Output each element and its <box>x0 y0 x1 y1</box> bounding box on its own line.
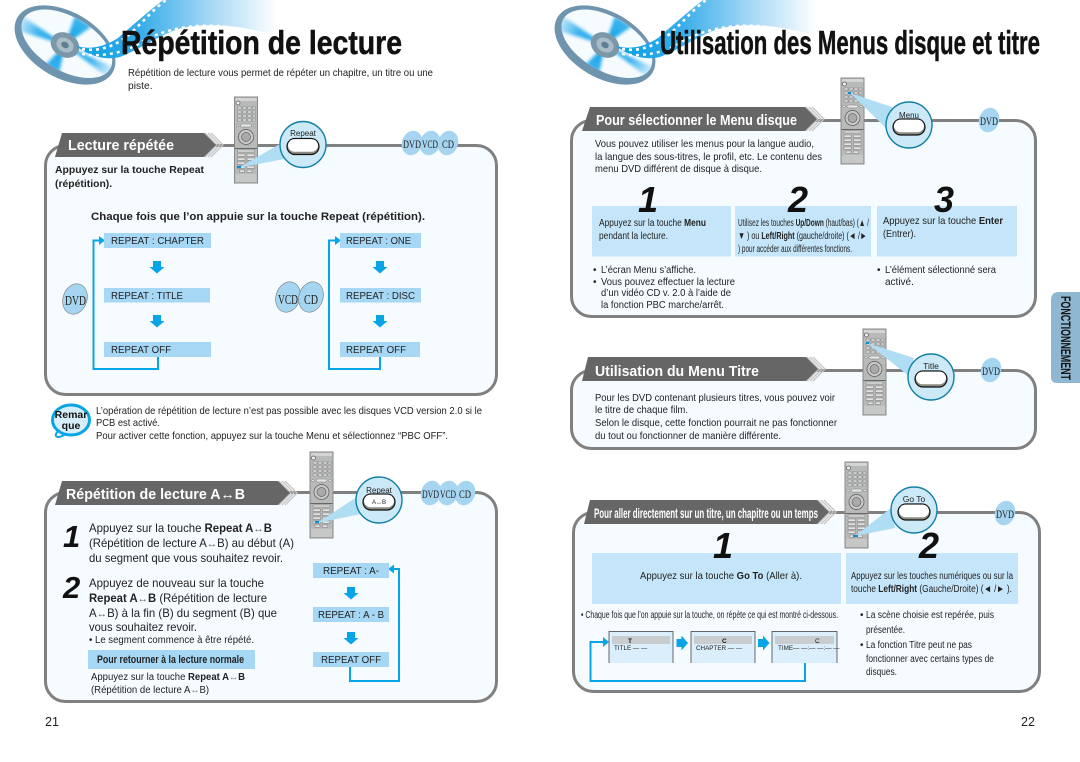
flow: A-B repeat modes: REPEAT OFF <box>321 655 381 666</box>
notes right: La fonction Titre peut ne pas <box>866 640 972 651</box>
screen: CHAPTER <box>691 632 755 663</box>
screen: TITLE <box>609 632 673 663</box>
instruction: (répétition). <box>55 179 112 190</box>
step 3 box: Appuyez sur la touche Enter <box>883 216 1003 227</box>
arrow <box>676 636 688 650</box>
flow: DVD repeat modes <box>94 233 211 369</box>
section tab <box>55 133 223 157</box>
panel: Répétition de lecture A-B <box>46 452 496 702</box>
callout box: return to normal play <box>88 650 255 669</box>
section tab: Lecture répétée <box>68 137 174 154</box>
disc badges DVD VCD CD: DVD <box>403 137 421 151</box>
section tab: Utilisation du Menu Titre <box>595 363 759 380</box>
intro text: la langue des sous-titres, le profil, etc. Le contenu des <box>595 152 822 163</box>
body text: Pour les DVD contenant plusieurs titres, vous pouvez voir <box>595 393 836 404</box>
flow: VCD / CD repeat modes: REPEAT : ONE <box>346 236 411 247</box>
page header graphic: left disc and film strip <box>1 0 277 101</box>
disc badges DVD VCD CD <box>399 128 461 158</box>
screen: CHAPTER: CHAPTER — — <box>696 645 743 652</box>
step 2 box: ▼ ) ou Left/Right (gauche/droite) (◄ /► <box>738 231 867 242</box>
step 1: du segment que vous souhaitez revoir. <box>89 551 283 565</box>
notes right: fonctionner avec certains types de <box>866 654 994 665</box>
step 3 box: (Entrer). <box>883 229 916 240</box>
flow: A-B repeat modes: REPEAT : A - B <box>318 610 384 621</box>
badges: VCD CD: CD <box>304 293 318 308</box>
flow: A-B repeat modes: REPEAT : A- <box>323 566 379 577</box>
side tab: FONCTIONNEMENT <box>1051 292 1080 383</box>
screen: TITLE: TITLE — — <box>614 645 648 652</box>
page number 22: 22 <box>1021 715 1035 729</box>
flow: DVD repeat modes: REPEAT OFF <box>111 345 171 356</box>
step 2 box: ) pour accéder aux différentes fonctions. <box>738 244 852 255</box>
step 1: Appuyez sur la touche Repeat A↔B <box>89 521 272 535</box>
badge: DVD: DVD <box>996 507 1014 521</box>
intro text <box>128 68 433 92</box>
page header graphic: right disc and film strip <box>541 0 817 101</box>
remote with Menu button callout: Menu <box>899 111 919 120</box>
remote with Title button callout <box>863 329 954 415</box>
remote with Go To button callout <box>845 462 937 548</box>
callout: Remarque: Remar <box>55 409 87 421</box>
intro text: Répétition de lecture vous permet de répéter un chapitre, un titre ou une <box>128 68 433 79</box>
panel: Utilisation du Menu Titre <box>572 329 1036 448</box>
badge: DVD <box>976 105 1002 135</box>
notes right: disques. <box>866 667 897 678</box>
remote with Repeat A-B button callout: A↔B <box>372 500 386 506</box>
return instructions: (Répétition de lecture A↔B) <box>91 685 209 696</box>
flow: VCD / CD repeat modes: REPEAT : DISC <box>346 291 415 302</box>
step 1 <box>63 519 294 565</box>
badge: DVD: DVD <box>980 114 998 128</box>
section tab <box>582 357 825 381</box>
flow: A-B repeat modes <box>313 563 399 681</box>
section tab <box>55 481 297 505</box>
notes left: Vous pouvez effectuer la lecture <box>601 277 735 288</box>
instruction: Appuyez sur la touche Repeat <box>55 165 205 176</box>
badges: VCD CD: VCD <box>278 293 298 308</box>
step 1: 1 <box>63 519 80 554</box>
body text: le titre de chaque film. <box>595 405 688 416</box>
panel: Pour sélectionner le Menu disque <box>572 78 1036 316</box>
screen: TIME: TIME— —:— —:— — <box>778 645 840 652</box>
remote with Repeat A-B button callout <box>310 452 402 538</box>
notes left: • <box>593 265 597 276</box>
step 2 box: touche Left/Right (Gauche/Droite) (◄ /► ). <box>851 584 1012 595</box>
screen: TITLE: T <box>628 638 632 645</box>
step 2 box: 2 <box>787 179 808 220</box>
note text: L’opération de répétition de lecture n’est pas possible avec les disques VCD version 2.0 si le <box>96 406 482 417</box>
arrow <box>758 636 770 650</box>
remote with Title button callout: Title <box>923 361 939 371</box>
flow: DVD repeat modes: REPEAT : TITLE <box>111 291 183 302</box>
step 2: vous souhaitez revoir. <box>89 620 197 634</box>
flow: VCD / CD repeat modes <box>329 233 421 369</box>
body text <box>595 393 838 442</box>
panel: Pour aller directement <box>574 462 1040 692</box>
notes left: L’écran Menu s’affiche. <box>601 265 696 276</box>
step 2: A↔B) à la fin (B) du segment (B) que <box>89 606 277 620</box>
instruction <box>55 165 205 190</box>
remote with Go To button callout: Go To <box>903 494 926 504</box>
step 1 box: pendant la lecture. <box>599 231 668 242</box>
intro text: Vous pouvez utiliser les menus pour la langue audio, <box>595 139 814 150</box>
note text <box>96 406 482 442</box>
step 2: Appuyez de nouveau sur la touche <box>89 576 264 590</box>
note text: Pour activer cette fonction, appuyez sur la touche Menu et sélectionnez “PBC OFF”. <box>96 431 448 442</box>
section tab <box>582 107 824 131</box>
side tab: FONCTIONNEMENT: FONCTIONNEMENT <box>1058 296 1073 380</box>
step 1 box <box>592 179 731 256</box>
intro text: menu DVD différent de disque à disque. <box>595 164 762 175</box>
badge: DVD <box>978 355 1004 385</box>
return instructions: Appuyez sur la touche Repeat A↔B <box>91 672 245 683</box>
flow: VCD / CD repeat modes: REPEAT OFF <box>346 345 406 356</box>
section tab <box>584 500 836 524</box>
step 2 box <box>846 525 1018 604</box>
intro text <box>595 139 822 175</box>
step 1 box: 1 <box>638 179 658 220</box>
section tab: Pour aller directement sur un titre, un chapitre ou un temps <box>594 505 818 521</box>
callout box: return to normal play: Pour retourner à la lecture normale <box>97 654 244 666</box>
note text: PCB est activé. <box>96 418 160 429</box>
notes right: activé. <box>885 277 914 288</box>
remote with Repeat A-B button callout: Repeat <box>366 486 393 495</box>
notes right: L’élément sélectionné sera <box>885 265 996 276</box>
return instructions <box>91 672 245 696</box>
notes left: • <box>593 277 597 288</box>
badge: DVD: DVD <box>65 294 86 309</box>
page number 21: 21 <box>45 715 59 729</box>
notes right <box>860 610 994 678</box>
badge: DVD <box>59 281 91 317</box>
subheading: Chaque fois que l’on appuie sur la touche Repeat (répétition). <box>91 211 425 223</box>
step 3 box: 3 <box>934 179 954 220</box>
screen: CHAPTER: C <box>722 638 727 645</box>
section tab: Pour sélectionner le Menu disque <box>596 113 797 129</box>
step 2 <box>62 570 277 646</box>
badge: DVD: DVD <box>982 364 1000 378</box>
intro text: piste. <box>128 81 153 92</box>
step 2: 2 <box>62 570 80 605</box>
screen sequence with loop <box>590 632 840 681</box>
step 1 box: Appuyez sur la touche Go To (Aller à). <box>640 571 802 582</box>
screen: TIME <box>772 632 840 663</box>
step 1 box: 1 <box>713 525 733 566</box>
notes left <box>593 265 735 311</box>
step 2 box: Utilisez les touches Up/Down (haut/bas) (▲ / <box>738 218 869 229</box>
flow: DVD repeat modes: REPEAT : CHAPTER <box>111 236 204 247</box>
step 2: Repeat A↔B (Répétition de lecture <box>89 591 267 605</box>
notes right: • <box>860 640 864 651</box>
section tab: Répétition de lecture A↔B <box>66 486 245 503</box>
bullet note: • Chaque fois que l’on appuie sur la touche, on répète ce qui est montré ci-dessous. <box>581 610 838 621</box>
step 2: • Le segment commence à être répété. <box>89 635 254 646</box>
callout: Remarque: que <box>62 420 80 432</box>
panel: Lecture répétée <box>46 97 496 394</box>
notes right: • <box>860 610 864 621</box>
step 1 box <box>592 525 841 604</box>
badge: DVD <box>992 498 1018 528</box>
body text: du tout ou fonctionner de manière différente. <box>595 431 781 442</box>
badges: VCD CD <box>272 279 327 315</box>
notes right: présentée. <box>866 625 905 636</box>
step 1: (Répétition de lecture A↔B) au début (A) <box>89 536 294 550</box>
notes right: • <box>877 265 881 276</box>
remote with Menu button callout <box>841 78 932 164</box>
disc badges DVD VCD CD: CD <box>459 487 471 501</box>
disc badges DVD VCD CD <box>418 478 478 508</box>
title: Répétition de lecture: Répétition de lecture <box>121 24 402 61</box>
disc badges DVD VCD CD: CD <box>442 137 454 151</box>
disc badges DVD VCD CD: VCD <box>422 137 438 151</box>
disc badges DVD VCD CD: VCD <box>440 487 456 501</box>
step 1 box: Appuyez sur la touche Menu <box>599 218 706 229</box>
callout: Remarque <box>52 405 90 437</box>
remote with Repeat button callout <box>234 97 326 183</box>
remote with Repeat button callout: Repeat <box>290 129 317 138</box>
step 2 box <box>735 179 871 256</box>
notes left: la fonction PBC marche/arrêt. <box>601 300 724 311</box>
notes right: La scène choisie est repérée, puis <box>866 610 994 621</box>
screen: TIME: C <box>815 638 820 645</box>
disc badges DVD VCD CD: DVD <box>422 487 439 501</box>
step 2 box: Appuyez sur les touches numériques ou sur la <box>851 571 1013 582</box>
notes right <box>877 265 996 288</box>
notes left: d’un vidéo CD v. 2.0 à l’aide de <box>601 288 731 299</box>
step 3 box <box>877 179 1017 256</box>
step 2 box: 2 <box>918 525 939 566</box>
body text: Selon le disque, cette fonction pourrait ne pas fonctionner <box>595 418 838 429</box>
